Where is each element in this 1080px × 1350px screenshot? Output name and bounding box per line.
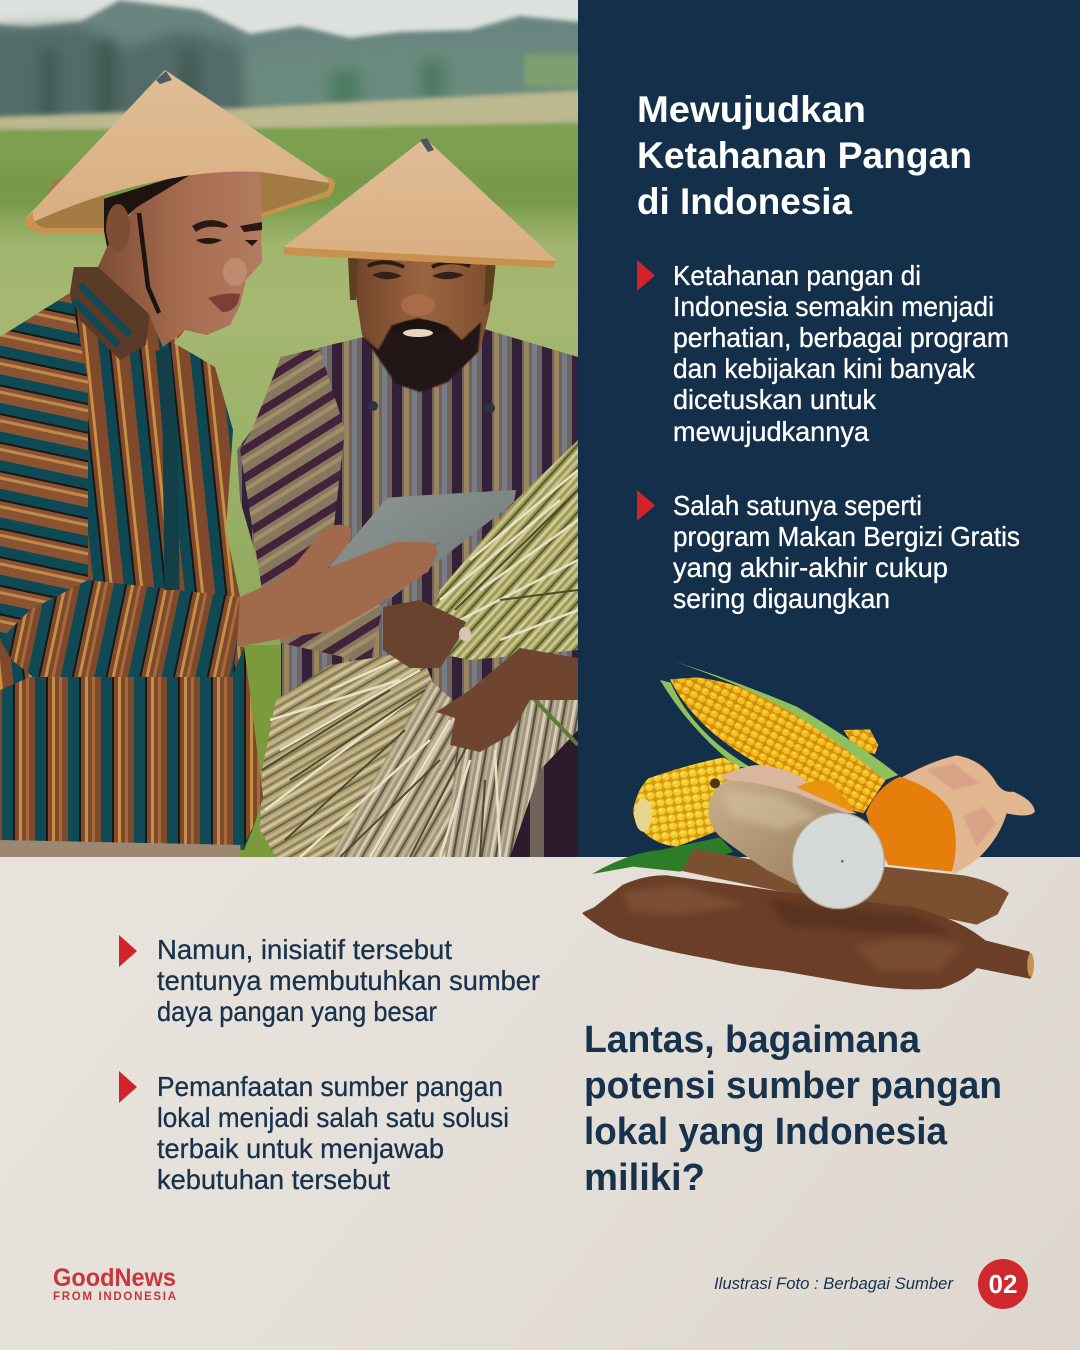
sweet potato flesh: [866, 777, 956, 872]
hand: right person lower hand: [436, 648, 578, 752]
pale cassava: [708, 778, 884, 909]
person right: face and beard: [348, 258, 496, 392]
hand: right person fist on bundle: [383, 600, 466, 668]
hat right: [283, 138, 556, 268]
text block: local food as solution: Pemanfaatan sumber pangan: [157, 1071, 503, 1102]
back sweet potato: [720, 765, 857, 813]
rice bundle: [260, 440, 578, 857]
back sweet potato flesh: [797, 781, 855, 813]
navy panel: [578, 0, 1080, 857]
photo: two farmers with tablet and rice bundle: [0, 0, 640, 857]
tablet: [329, 490, 516, 606]
text block: food security attention: dan kebijakan kini banyak: [673, 353, 975, 384]
middle cassava: [683, 850, 1007, 923]
bullet marker 4: [119, 1071, 137, 1103]
text block: free nutritious meals programme: Salah satunya seperti: [673, 490, 922, 521]
page number badge: [978, 1259, 1028, 1309]
main heading: di Indonesia: [637, 181, 852, 222]
logo: GoodNews from Indonesia: GoodNews: [53, 1264, 176, 1292]
text block: food security attention: Ketahanan pangan di: [673, 260, 921, 291]
hand: left person holding tablet: [237, 525, 437, 647]
text block: free nutritious meals programme: program Makan Bergizi Gratis: [673, 521, 1020, 552]
husk leaves: [660, 662, 898, 780]
text block: local food as solution: terbaik untuk menjawab: [157, 1133, 444, 1164]
text block: local food as solution: [157, 1071, 509, 1195]
person left: shirt: [0, 267, 263, 857]
person left: neck and face: [98, 165, 262, 347]
cob end: [635, 798, 652, 832]
text block: food security attention: perhatian, berbagai program: [673, 322, 1009, 353]
text block: large food resources needed: Namun, inisiatif tersebut: [157, 934, 452, 965]
main heading: Ketahanan Pangan: [637, 135, 972, 176]
text block: free nutritious meals programme: [673, 490, 1020, 614]
sweet potato pink markings: [927, 763, 997, 847]
bullet marker 2: [637, 490, 655, 521]
text block: food security attention: [673, 260, 1009, 447]
main heading: Mewujudkan: [637, 89, 866, 130]
text block: food security attention: mewujudkannya: [673, 416, 870, 447]
bullet marker 3: [119, 935, 137, 967]
bullet marker 1: [637, 260, 655, 291]
text block: free nutritious meals programme: yang akhir-akhir cukup: [673, 552, 948, 583]
green leaf: [592, 837, 733, 874]
blurred background: sky, trees and rice field: [0, 0, 640, 857]
main heading: [637, 89, 972, 222]
question heading: lokal yang Indonesia: [584, 1111, 948, 1153]
main corn cob: [670, 677, 887, 813]
back corn cob: [843, 729, 878, 754]
large cassava: [584, 877, 1034, 988]
thumb nail: [459, 627, 471, 641]
food illustration: corn, sweet potato and cassava: [584, 662, 1035, 988]
left corn cob: [633, 757, 740, 847]
photo credit: Ilustrasi Foto : Berbagai Sumber: [714, 1274, 954, 1293]
logo: GoodNews from Indonesia: FROM INDONESIA: [53, 1291, 176, 1303]
text block: large food resources needed: tentunya membutuhkan sumber: [157, 965, 540, 996]
text block: large food resources needed: daya pangan yang besar: [157, 996, 437, 1027]
logo: GoodNews from Indonesia: [53, 1264, 176, 1303]
question heading: miliki?: [584, 1157, 705, 1199]
text block: free nutritious meals programme: sering digaungkan: [673, 583, 890, 614]
question heading: Lantas, bagaimana: [584, 1019, 921, 1061]
page number badge: 02: [989, 1269, 1017, 1299]
text block: local food as solution: kebutuhan tersebut: [157, 1164, 390, 1195]
text block: food security attention: Indonesia semakin menjadi: [673, 291, 994, 322]
hat left: [25, 70, 336, 233]
person right: striped shirt: [237, 328, 578, 857]
text block: local food as solution: lokal menjadi salah satu solusi: [157, 1102, 509, 1133]
text block: large food resources needed: [157, 934, 540, 1027]
sweet potato skin: [900, 755, 1035, 874]
question heading: [584, 1019, 1002, 1199]
question heading: potensi sumber pangan: [584, 1065, 1002, 1107]
text block: food security attention: dicetuskan untuk: [673, 384, 876, 415]
